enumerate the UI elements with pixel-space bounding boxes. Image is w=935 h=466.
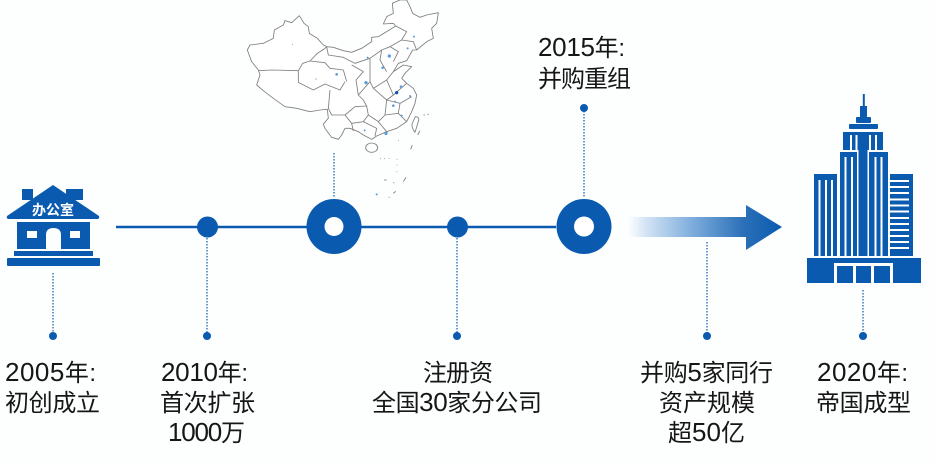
milestone 2005: text: 2005年:: [5, 357, 96, 387]
milestone 2005: text: [5, 357, 100, 417]
milestone 2015: text: 2015年:: [538, 32, 625, 62]
milestone acquisitions: text: 资产规模: [659, 390, 755, 417]
milestone 2020: text: 帝国成型: [816, 390, 911, 417]
milestone 2015: node: [556, 104, 612, 254]
milestone registered capital: text: 全国30家分公司: [372, 387, 542, 417]
milestone registered capital: text: 注册资: [423, 360, 493, 387]
milestone 2010: text: 1000万: [168, 417, 245, 447]
milestone acquisitions: text: 超50亿: [668, 417, 745, 447]
milestone 2010: text: 2010年:: [161, 357, 248, 387]
milestone 2015: text: [538, 32, 631, 93]
milestone 2010: text: [160, 357, 255, 447]
milestone 2020: connector: [859, 290, 867, 340]
arrow: [628, 205, 782, 250]
milestone 2010: text: 首次扩张: [160, 390, 255, 417]
milestone registered capital: text: [372, 360, 542, 417]
milestone acquisitions: connector: [703, 242, 711, 340]
icon: office house: 办公室: [32, 202, 74, 218]
milestone 2005: text: 初创成立: [5, 390, 100, 417]
milestone 2020: text: 2020年:: [817, 357, 908, 387]
map of China: [247, 0, 438, 197]
timeline line: [116, 226, 556, 228]
milestone acquisitions: text: 并购5家同行: [640, 357, 773, 387]
milestone 2005: connector: [49, 273, 57, 340]
icon: office house: [7, 185, 100, 266]
milestone 2020: text: [816, 357, 911, 417]
milestone 2010: node: [197, 216, 218, 340]
milestone map: node: [306, 153, 362, 254]
milestone registered capital: node: [447, 216, 468, 340]
icon: skyscraper: [807, 94, 921, 283]
milestone 2015: text: 并购重组: [538, 66, 631, 93]
milestone acquisitions: text: [640, 357, 773, 447]
